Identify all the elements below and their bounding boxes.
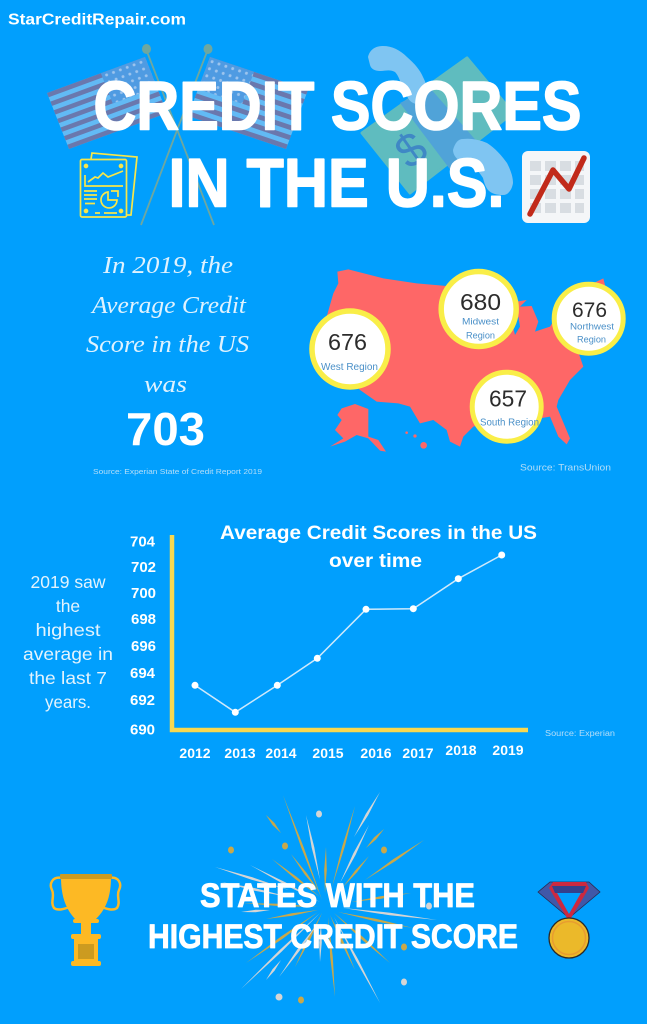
chart title [220,523,537,572]
chart title: Average Credit Scores in the US [220,523,537,544]
text block: average score: Score in the US [86,332,249,358]
title [94,68,582,222]
y axis labels: 694 [130,665,156,682]
y axis labels: 696 [131,638,156,655]
data line [195,555,502,712]
icon: crossed American flags [47,44,308,225]
badge: Midwest Region: Region [466,330,495,342]
y axis labels [130,534,156,738]
icon: trophy [51,874,120,966]
line chart: average credit scores over time [130,523,537,761]
text block: 2019 highest average: the last 7 [29,668,107,688]
icon: winged dollar bill [362,46,513,195]
badge: Midwest Region: 680 [460,289,501,315]
x axis labels: 2012 [179,745,211,761]
heading: states with the highest credit score: STATES WITH THE [200,877,475,915]
badge: Northwest Region [554,284,623,353]
source: Experian: Source: Experian [545,729,615,738]
source: TransUnion: Source: TransUnion [520,462,611,474]
badge: West Region: West Region [321,362,378,373]
title: CREDIT SCORES [94,68,582,144]
text block: 2019 highest average: the [56,596,80,616]
y axis labels: 704 [130,534,156,550]
x axis labels: 2017 [402,745,434,761]
chart axes [172,535,528,730]
map: US regions [312,269,623,452]
badge: Midwest Region [441,272,516,346]
y axis labels: 692 [130,692,155,709]
badge: South Region: South Region [480,418,539,428]
y axis labels: 698 [131,611,156,628]
text block: 2019 highest average [23,572,113,712]
x axis labels: 2019 [492,742,524,758]
text block: 2019 highest average: highest [36,620,101,640]
x axis labels: 2018 [445,742,477,758]
text block: average score: was [144,372,187,398]
badge: Northwest Region: Region [577,334,606,346]
y axis labels: 702 [131,559,156,576]
logo text: StarCreditRepair.com [8,12,186,28]
badge: West Region [312,311,388,387]
heading: states with the highest credit score: HIGHEST CREDIT SCORE [148,918,518,956]
icon: medal [538,882,600,958]
source: Experian report: Source: Experian State of Credit Report 2019 [93,467,262,476]
x axis labels: 2016 [360,745,392,761]
badge: South Region: 657 [489,386,527,412]
text block: 2019 highest average: 2019 saw [30,572,106,592]
data points [192,552,505,716]
icon: rising chart [522,151,590,223]
text block: average score: Average Credit [90,293,247,319]
icon: winged dollar bill: $ [385,120,437,179]
heading: states with the highest credit score [148,877,518,956]
text block: 2019 highest average: average in [23,644,113,664]
icon: firework burst [215,792,437,1004]
x axis labels: 2015 [312,745,344,761]
badge: West Region: 676 [328,329,367,355]
icon: report papers [80,153,137,217]
x axis labels: 2013 [224,745,256,761]
chart title: over time [329,551,422,572]
title: IN THE U.S. [168,144,504,222]
y axis labels: 700 [131,585,156,602]
x axis labels: 2014 [265,745,297,761]
text block: 2019 highest average: years. [45,692,91,712]
text block: average score [86,253,249,398]
x axis labels [179,742,524,761]
badge: Northwest Region: Northwest [570,322,614,332]
big number: 703: 703 [126,403,205,455]
badge: Midwest Region: Midwest [462,316,499,328]
badge: Northwest Region: 676 [572,299,607,322]
badge: South Region [472,372,541,441]
y axis labels: 690 [130,722,155,738]
text block: average score: In 2019, the [102,253,233,279]
